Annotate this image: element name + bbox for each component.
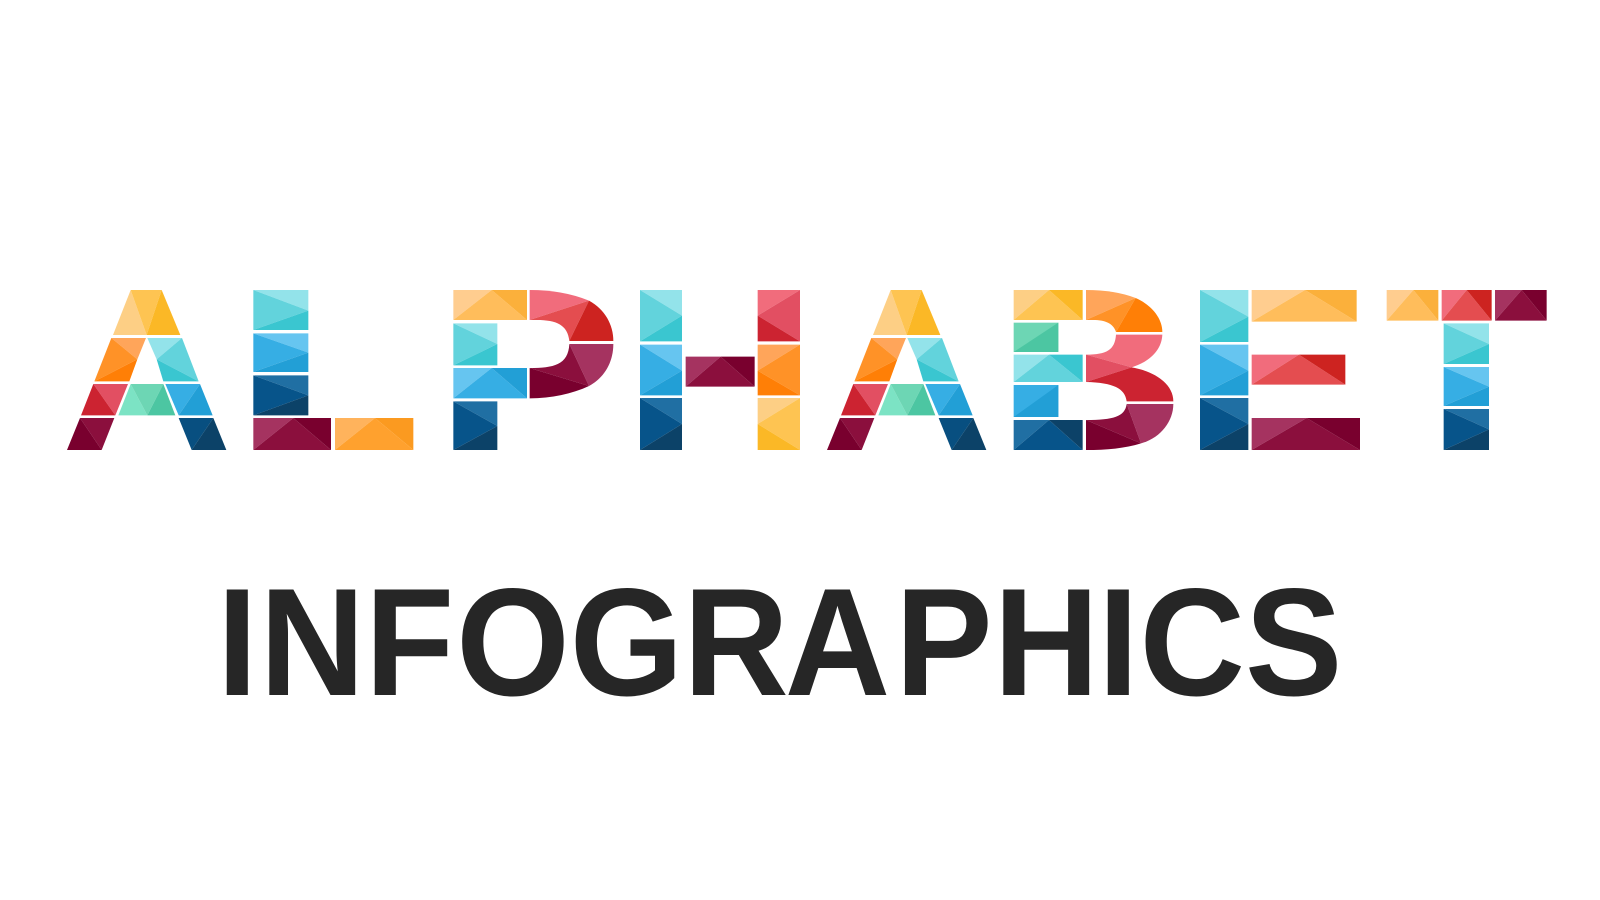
P cyan block	[453, 323, 497, 365]
A lower right block	[925, 384, 973, 415]
P top bar	[453, 290, 527, 320]
H red block	[758, 290, 800, 341]
L blue block	[253, 333, 308, 372]
letter L	[253, 290, 413, 450]
B green block	[1014, 323, 1058, 352]
T right arm	[1495, 290, 1547, 321]
B top bowl	[1086, 290, 1162, 332]
A upper left block	[854, 338, 906, 381]
T cyan block	[1444, 323, 1489, 364]
A lower left block	[841, 384, 888, 415]
H navy block	[640, 398, 682, 450]
H yellow block	[758, 398, 800, 450]
T blue block	[1444, 367, 1489, 406]
letter P	[453, 290, 613, 450]
B cyan bar	[1014, 355, 1083, 382]
B waist	[1086, 335, 1162, 382]
L cyan block	[253, 290, 308, 330]
E middle arm	[1252, 355, 1345, 385]
A lower right block	[165, 384, 213, 415]
second letter A	[827, 290, 986, 450]
A upper left block	[94, 338, 146, 381]
A right foot	[179, 418, 226, 450]
E cyan block	[1200, 290, 1248, 342]
E blue block	[1200, 345, 1248, 395]
H crossbar	[686, 357, 755, 387]
T middle arm	[1442, 290, 1492, 321]
A upper right block	[147, 338, 199, 381]
E top arm	[1252, 290, 1357, 322]
A left foot	[827, 418, 874, 450]
letter H	[640, 290, 800, 450]
A crossbar block	[878, 384, 935, 415]
B navy bar	[1014, 420, 1083, 450]
H cyan block	[640, 290, 682, 341]
P upper bowl	[530, 290, 613, 341]
L wine foot	[253, 418, 331, 450]
B top bar	[1014, 290, 1083, 320]
B bottom bowl	[1086, 404, 1173, 450]
B blue block	[1014, 385, 1058, 417]
T navy block	[1444, 409, 1489, 450]
A crossbar block	[118, 384, 175, 415]
P lower bowl	[530, 344, 613, 398]
T left arm	[1387, 290, 1438, 321]
A upper right block	[907, 338, 959, 381]
letter E	[1200, 290, 1360, 450]
L navy block	[253, 375, 308, 415]
P blue bar	[453, 368, 527, 398]
L orange foot	[335, 418, 413, 450]
title: ALPHABET colourful faceted letters	[67, 290, 1547, 450]
E navy block	[1200, 398, 1248, 450]
A right foot	[939, 418, 986, 450]
P navy block	[453, 401, 497, 450]
letter T	[1387, 290, 1547, 450]
letter A	[67, 290, 226, 450]
A top block	[113, 290, 180, 335]
A left foot	[67, 418, 114, 450]
A top block	[873, 290, 940, 335]
letter B	[1014, 290, 1173, 450]
subtitle: INFOGRAPHICS: INFOGRAPHICS	[217, 556, 1342, 728]
B lower bowl	[1086, 367, 1173, 401]
H blue block	[640, 345, 682, 395]
H orange block	[758, 345, 800, 395]
E bottom arm	[1252, 418, 1360, 450]
A lower left block	[81, 384, 128, 415]
